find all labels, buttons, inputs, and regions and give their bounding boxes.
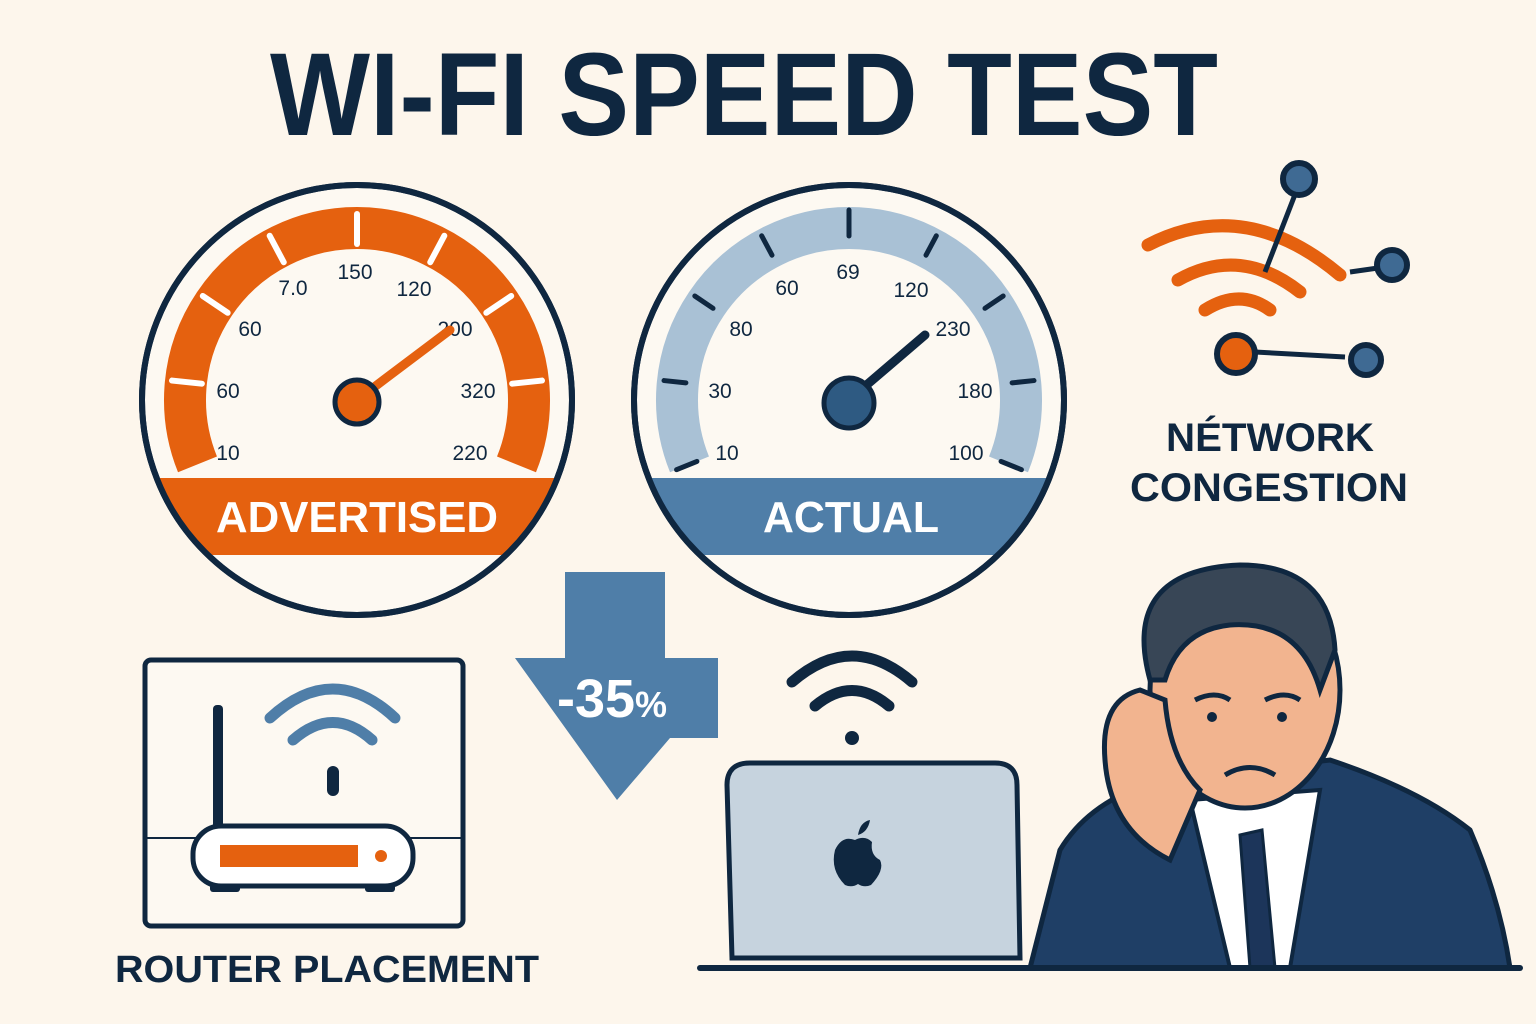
gauge: actual: 80 — [729, 318, 753, 341]
gauge: advertised: 10 — [216, 442, 240, 465]
gauge: actual: 69 — [836, 261, 860, 284]
gauge: advertised — [138, 185, 578, 615]
gauge: advertised: 220 — [452, 442, 488, 465]
label: network congestion: NÉTWORK — [1166, 415, 1374, 460]
gauge: actual: 100 — [948, 442, 984, 465]
laptop — [727, 763, 1020, 958]
gauge: actual: 120 — [893, 279, 929, 302]
icon: laptop wifi — [792, 656, 912, 745]
gauge: actual: 30 — [708, 380, 732, 403]
title: WI-FI SPEED TEST — [270, 29, 1218, 161]
banner — [160, 478, 554, 555]
gauge: advertised: 320 — [460, 380, 496, 403]
gauge: actual — [630, 185, 1070, 615]
gauge: advertised: 60 — [216, 380, 240, 403]
gauge: advertised: 60 — [238, 318, 262, 341]
panel: router placement — [145, 660, 463, 926]
needle — [357, 330, 450, 400]
arrow: -35% — [515, 572, 718, 800]
gauge: advertised: 7.0 — [278, 277, 308, 300]
needle — [849, 335, 925, 400]
arrow: -35%: -35% — [557, 669, 667, 729]
person — [1030, 565, 1510, 968]
gauge: actual: 180 — [957, 380, 993, 403]
banner — [652, 478, 1046, 555]
baseline — [700, 965, 1520, 971]
label: network congestion: CONGESTION — [1130, 466, 1408, 510]
gauge: advertised: ADVERTISED — [216, 493, 498, 542]
gauge: advertised: 200 — [437, 318, 473, 341]
label: router placement: ROUTER PLACEMENT — [115, 949, 539, 991]
gauge: actual: 230 — [935, 318, 971, 341]
label: network congestion — [1130, 415, 1408, 510]
gauge: advertised: 120 — [396, 278, 432, 301]
gauge: advertised: 150 — [337, 261, 373, 284]
gauge: actual: 10 — [715, 442, 739, 465]
gauge: actual: 60 — [775, 277, 799, 300]
icon: network congestion — [1148, 163, 1407, 375]
gauge: actual: ACTUAL — [763, 493, 939, 542]
